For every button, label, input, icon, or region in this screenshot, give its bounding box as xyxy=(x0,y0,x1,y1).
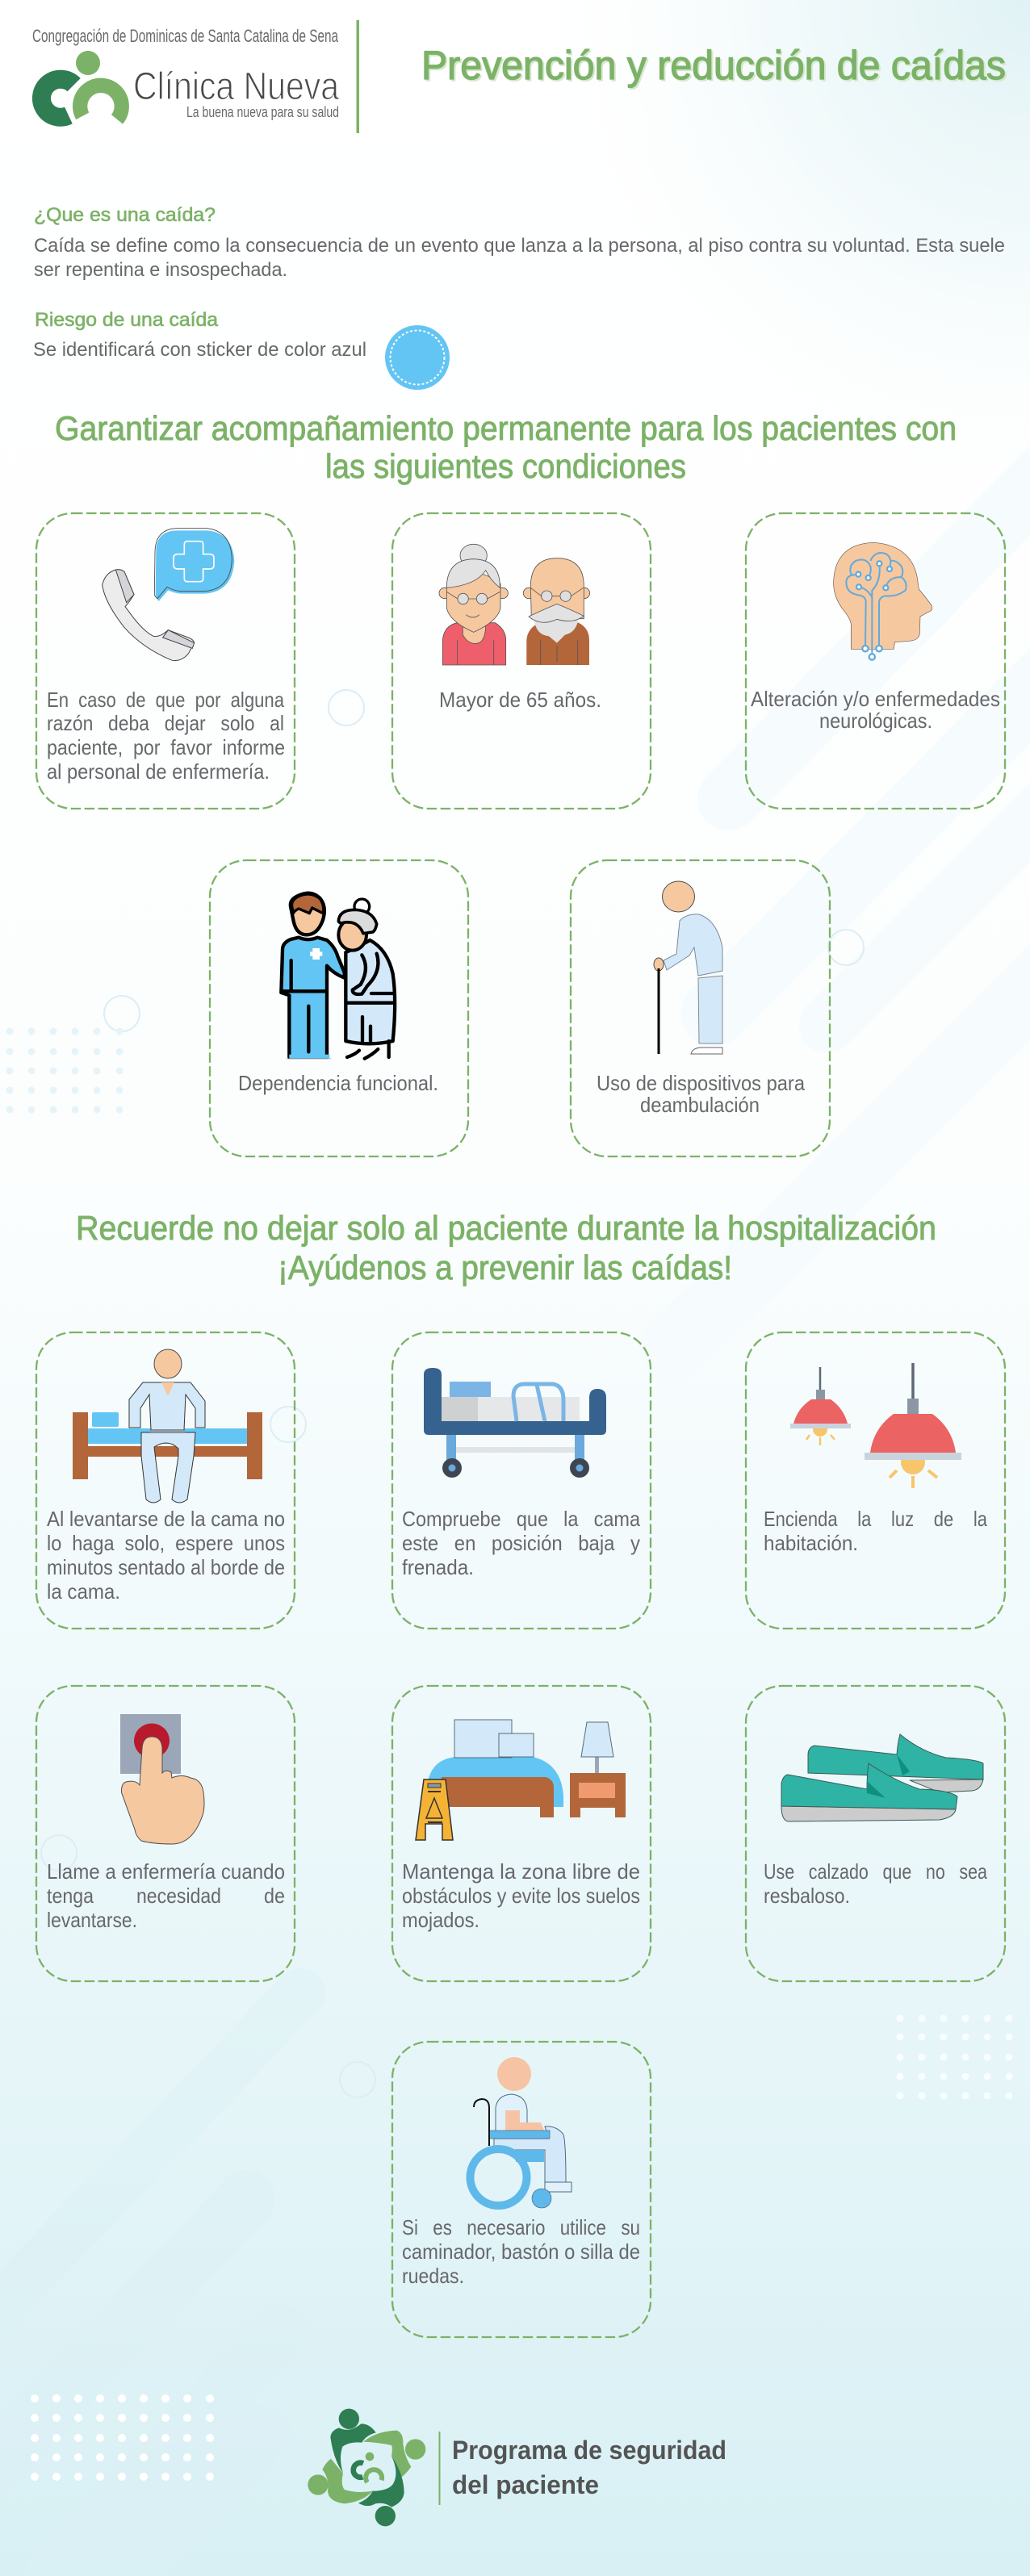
text: llamar: levantarse. xyxy=(47,1908,137,1932)
icon: head with brain circuit xyxy=(834,542,932,660)
text: zona libre: Mantenga la zona libre de xyxy=(402,1859,640,1884)
text: cama baja: frenada. xyxy=(402,1555,474,1579)
footer text: Programa de seguridad xyxy=(452,2436,726,2465)
text: llamar: Llame a enfermería cuando xyxy=(47,1859,285,1884)
text: calzado: resbaloso. xyxy=(764,1884,850,1908)
text: calzado: Use calzado que no sea xyxy=(764,1859,987,1884)
panel: dispositivos xyxy=(571,860,830,1156)
text: cama baja xyxy=(402,1507,640,1579)
heading: garantizar: Garantizar acompañamiento permanente para los pacientes con xyxy=(55,409,957,447)
section: que es una caida: Caída se define como la consecuencia de un evento que lanza a la persona, al piso contra su voluntad. Esta suele xyxy=(34,235,1005,257)
header logo: Clínica Nueva xyxy=(32,26,339,120)
header logo: Clínica Nueva: Congregación de Dominicas de Santa Catalina de Sena xyxy=(32,26,339,46)
text: dispositivos: Uso de dispositivos para xyxy=(597,1071,805,1095)
panel: teléfono xyxy=(36,513,295,809)
section: que es una caida: ¿Que es una caída? xyxy=(34,204,216,226)
text: calzado xyxy=(764,1859,987,1908)
panel: neurológicas xyxy=(746,513,1005,809)
icon: non-slip shoes xyxy=(781,1734,983,1821)
section: que es una caida xyxy=(34,204,1005,281)
text: llamar: tenga xyxy=(47,1884,94,1908)
footer logo: programa de seguridad xyxy=(308,2409,425,2526)
panel: cama baja xyxy=(392,1332,651,1629)
panel: llamar a enfermería xyxy=(36,1686,295,1981)
header logo: Clínica Nueva: La buena nueva para su salud xyxy=(186,103,339,120)
text: cama baja: este en posición baja y xyxy=(402,1531,640,1555)
footer text: del paciente xyxy=(452,2470,599,2499)
title: Prevención y reducción de caídas xyxy=(421,43,1006,88)
text: levantarse: Al levantarse de la cama no xyxy=(47,1507,285,1531)
panel: levantarse xyxy=(36,1332,295,1629)
text: zona libre xyxy=(402,1859,640,1932)
heading: garantizar: las siguientes condiciones xyxy=(325,447,686,485)
header logo: Clínica Nueva: Clínica Nueva xyxy=(133,65,339,108)
icon: bedroom with wet floor sign xyxy=(416,1720,626,1840)
icon: phone and medical bubble xyxy=(103,529,234,661)
text: zona libre: mojados. xyxy=(402,1908,479,1932)
panel: mayor de 65 xyxy=(392,513,651,809)
text: zona libre: obstáculos y evite los suelos xyxy=(402,1884,640,1908)
text: teléfono: razón deba dejar solo al xyxy=(47,711,284,735)
text: silla de ruedas: Si es necesario utilice su xyxy=(402,2215,640,2239)
text: levantarse: minutos sentado al borde de xyxy=(47,1555,285,1579)
header divider xyxy=(357,20,359,133)
text: llamar: de xyxy=(264,1884,285,1908)
panel: dependencia funcional xyxy=(210,860,468,1156)
icon: elderly couple xyxy=(439,544,590,665)
text: llamar xyxy=(47,1859,285,1932)
icon: person in wheelchair xyxy=(470,2057,572,2208)
text: neurológicas: neurológicas. xyxy=(819,709,932,733)
text: luz: habitación. xyxy=(764,1531,858,1555)
text: luz xyxy=(764,1507,987,1555)
text: dependencia: Dependencia funcional. xyxy=(238,1071,438,1095)
text: cama baja: Compruebe que la cama xyxy=(402,1507,640,1531)
text: teléfono xyxy=(47,688,285,784)
section: riesgo de una caida xyxy=(33,309,366,361)
section: riesgo de una caida: Se identificará con sticker de color azul xyxy=(33,339,366,361)
text: neurológicas xyxy=(751,687,1000,733)
heading: recuerde xyxy=(76,1209,936,1286)
text: silla de ruedas: caminador, bastón o silla de xyxy=(402,2239,640,2264)
text: teléfono: En caso de que por alguna xyxy=(47,688,284,712)
section: riesgo de una caida: Riesgo de una caída xyxy=(35,309,219,331)
footer divider xyxy=(439,2432,441,2505)
text: luz: Encienda la luz de la xyxy=(764,1507,987,1531)
text: llamar: necesidad xyxy=(136,1884,221,1908)
section: que es una caida: ser repentina e insospechada. xyxy=(34,259,287,281)
panel: calzado xyxy=(746,1686,1005,1981)
text: teléfono: al personal de enfermería. xyxy=(47,759,270,784)
icon: hospital bed xyxy=(424,1368,606,1478)
panel: luz xyxy=(746,1332,1005,1629)
text: teléfono: paciente, por favor informe xyxy=(47,735,285,759)
text: silla de ruedas xyxy=(402,2215,640,2288)
text: levantarse: la cama. xyxy=(47,1579,120,1604)
text: dispositivos xyxy=(597,1071,805,1117)
heading: garantizar xyxy=(55,409,957,485)
text: mayor de 65: Mayor de 65 años. xyxy=(439,688,601,712)
text: dispositivos: deambulación xyxy=(640,1093,760,1117)
icon: blue sticker xyxy=(385,325,450,390)
icon: patient sitting on bed xyxy=(73,1349,262,1503)
footer text xyxy=(452,2436,726,2499)
text: silla de ruedas: ruedas. xyxy=(402,2264,464,2288)
icon: hand pressing call button xyxy=(120,1714,204,1844)
icon: elder with cane xyxy=(654,881,722,1054)
heading: recuerde: ¡Ayúdenos a prevenir las caídas! xyxy=(278,1248,732,1286)
text: levantarse: lo haga solo, espere unos xyxy=(47,1531,285,1555)
panel: silla de ruedas xyxy=(392,2042,651,2337)
heading: recuerde: Recuerde no dejar solo al paciente durante la hospitalización xyxy=(76,1209,936,1247)
icon: nurse helping elder xyxy=(281,893,395,1059)
icon: ceiling lamps xyxy=(790,1363,961,1488)
panel: zona libre xyxy=(392,1686,651,1981)
text: neurológicas: Alteración y/o enfermedades xyxy=(751,687,1000,711)
text: levantarse xyxy=(47,1507,285,1604)
